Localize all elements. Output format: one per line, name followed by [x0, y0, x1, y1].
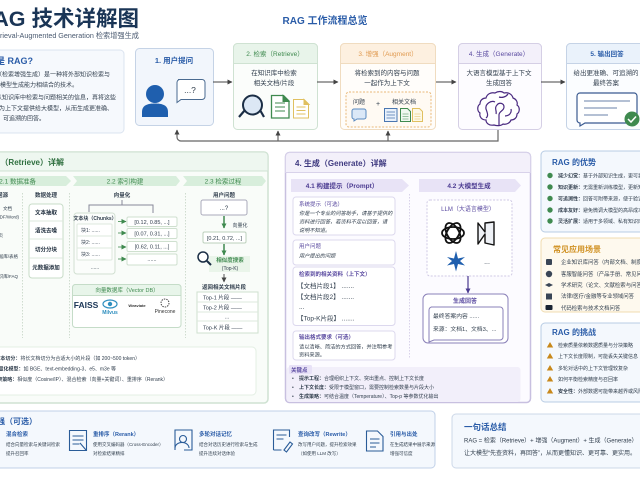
list: challenges: 如何平衡检索精度与召回率 — [558, 376, 618, 383]
box: system prompt: 资料进行回答，若资料不足以回答，请 — [299, 218, 388, 226]
callout: key points: 生成策略：可结合温度（Temperature）、Top-p 等参数优化输出 — [299, 393, 438, 400]
box: retrieved context: 【Top-K片段】 ....... — [297, 314, 355, 322]
item: query rewrite: 改写用户问题，提升检索效果 — [298, 441, 357, 448]
text block: retrieve description: 相关文档/片段 — [254, 78, 295, 87]
icon: Milvus: Milvus — [102, 310, 118, 316]
box: generated answer: 来源：文档1、文档3、... — [433, 325, 497, 333]
text block: retrieve description: 在知识库中检索 — [251, 68, 297, 77]
panel: step 4 generate: 4. 生成（Generate） — [469, 49, 529, 58]
panel: what is RAG — [0, 50, 124, 133]
panel: RAG advantages — [541, 151, 640, 232]
box: generated answer — [423, 294, 508, 343]
diagram: retrieval process: Top-2 片段 —— — [203, 304, 242, 312]
item: citations — [366, 430, 435, 457]
box: generated answer: 最终答案内容 ...... — [433, 312, 479, 320]
icon: knot logo — [442, 220, 464, 246]
icon: speech bubble: ...? — [184, 85, 196, 95]
arrow: step 1 to 2 — [213, 81, 232, 83]
column: data processing — [29, 191, 63, 278]
panel: step 1 user question — [136, 48, 214, 126]
icon: answer bubble with check — [577, 93, 640, 126]
diagram: retrieval process: Top-1 片段 —— — [203, 294, 242, 302]
icon: magnifier — [239, 96, 264, 117]
box: output format: 输出格式要求（可选） — [299, 333, 354, 341]
arrow: step 4 to 5 — [541, 81, 565, 83]
heading: workflow overview: RAG 工作流程总览 — [282, 14, 368, 27]
text block: output description — [574, 68, 639, 87]
heading: step 1: 1. 用户提问 — [155, 55, 193, 65]
panel: vector database: 向量数据库（Vector DB） — [95, 286, 159, 294]
callout: key points: • — [292, 385, 294, 391]
diagram: retrieval process: ...? — [220, 206, 229, 212]
box: user question — [293, 240, 395, 265]
item: hybrid search: 结合向量检索与关键词检索 — [6, 441, 60, 448]
item: conversation memory: 结合对话历史进行检索与生成 — [199, 441, 258, 448]
arrow: step 3 to 4 — [436, 81, 456, 83]
diagram: vectorization: [0.12, 0.85, ...] — [134, 220, 170, 226]
text block: augment description — [354, 68, 420, 87]
panel: challenges: RAG 的挑战 — [552, 327, 596, 337]
callout: key points: 提示工程：合理组织上下文、突出重点、控制上下文长度 — [299, 375, 424, 382]
diagram: retrieval process: 用户问题 — [213, 191, 235, 199]
panel: use cases — [541, 238, 640, 312]
panel: step 3 augment: 3. 增强（Augment） — [358, 49, 418, 58]
text block: definition — [0, 70, 116, 122]
diagram: vectorization: ...... — [91, 265, 99, 271]
item: hybrid search: 提升召回率 — [6, 450, 29, 457]
box: LLM models — [427, 200, 512, 276]
panel: one-sentence summary: 一句话总结 — [464, 422, 507, 432]
panel: one-sentence summary — [452, 414, 640, 468]
text block: output description: 最终答案 — [593, 78, 620, 87]
column: data processing: 切分分块 — [35, 246, 57, 254]
box: retrieved context: 【文档片段1】 ....... — [297, 281, 354, 290]
diagram: vectorization: 块2: ...... — [81, 239, 100, 246]
box: generated answer: 生成回答 — [453, 297, 477, 305]
icon: Pinecone: Pinecone — [155, 309, 176, 315]
box: LLM models: LLM（大语言模型） — [441, 205, 495, 213]
box: user question: 用户提出的问题 — [299, 252, 336, 260]
list: challenges: 上下文长度限制，可能丢失关键信息 — [558, 353, 638, 360]
chevrons: retrieve sections: 2.3 检索过程 — [205, 176, 242, 186]
icons: green checks — [547, 173, 553, 224]
diagram: vectorization: 块3: ...... — [81, 251, 100, 258]
callout: key points: 关键点 — [291, 366, 308, 374]
list: challenges: 检索质量依赖数据质量与分块策略 — [558, 342, 633, 349]
panel: vector database: FAISS — [74, 300, 99, 310]
item: rerank: 重排序（Rerank） — [93, 430, 139, 438]
chevrons: retrieve sections — [0, 176, 266, 186]
list: challenges — [558, 342, 640, 395]
text block: summary — [464, 436, 638, 457]
panel: step 2 retrieve: 2. 检索（Retrieve） — [246, 49, 304, 58]
diagram: retrieval process: Top-K 片段 —— — [203, 324, 243, 332]
diagram: retrieval process — [197, 191, 258, 333]
box: output format — [293, 331, 395, 360]
text block: generate description — [466, 68, 532, 87]
box: LLM models: ... — [484, 259, 490, 266]
icon: green document — [272, 96, 289, 118]
diagram: vectorization: 块1: ...... — [81, 227, 100, 234]
text block: retrieve description — [251, 68, 297, 87]
panel: vector database: Weaviate — [128, 303, 146, 308]
text block: augment description: 将检索到的内容与问题 — [354, 68, 420, 77]
diagram: retrieval process: 相似度搜索 — [216, 256, 244, 264]
icon: angular logo — [478, 222, 494, 245]
panel: step 4 generate — [458, 44, 542, 130]
callout: key points: • — [292, 376, 294, 382]
chevrons: retrieve sections: 2.1 数据准备 — [0, 176, 36, 186]
box: output format: 资料来源。 — [299, 350, 325, 358]
item: citations: 引用与出处 — [390, 430, 418, 438]
arrow: feedback loop — [177, 130, 498, 141]
item: conversation memory: 提升连续对话体验 — [199, 450, 235, 457]
diagram: retrieval process: [0.21, 0.72, ...] — [207, 236, 243, 242]
list: use cases: 法律/医疗/金融等专业领域问答 — [561, 292, 635, 300]
heading: generate detail: 4. 生成（Generate）详解 — [295, 158, 387, 168]
arrow: LLM to answer — [467, 276, 469, 293]
panel: retrieve detail — [0, 152, 268, 403]
item: query rewrite — [274, 430, 357, 457]
icon: search — [198, 252, 211, 265]
panel: generate detail — [286, 152, 530, 402]
box: system prompt — [293, 197, 395, 235]
text block: generate description: 生成回答 — [486, 78, 512, 87]
panel: challenges — [541, 323, 640, 402]
diagram: question plus documents: + — [376, 101, 380, 108]
diagram: question plus documents — [346, 92, 431, 127]
item: rerank — [70, 430, 164, 457]
box: retrieved context — [293, 267, 395, 326]
item: citations: 增强可信度 — [390, 450, 413, 457]
callout: retrieve key points — [0, 347, 256, 395]
item: hybrid search: 混合检索 — [6, 430, 29, 438]
text block: generate description: 大语言模型基于上下文 — [466, 68, 532, 77]
item: rerank: 使用交叉编码器（Cross-Encoder） — [93, 441, 164, 448]
panel: RAG advantages: RAG 的优势 — [552, 157, 596, 167]
callout: key points: 上下文长度：受限于模型窗口，需要控制检索数量与片段大小 — [299, 384, 434, 391]
icon: blue star — [447, 251, 465, 272]
diagram: vectorization: [0.62, 0.11, ...] — [135, 244, 170, 250]
chevrons: generate sections — [291, 179, 521, 192]
column: data sources — [0, 191, 19, 280]
box: retrieved context: 【文档片段2】 ....... — [297, 292, 354, 301]
list: use cases: 代码检索与技术文档问答 — [561, 304, 621, 312]
box: system prompt: 说明不知道。 — [299, 227, 330, 234]
panel: vector database — [72, 284, 181, 328]
diagram: retrieval process: 返回相关文档片段 — [202, 283, 246, 291]
icon: brain — [478, 92, 519, 126]
box: output format: 请以清晰、简洁的方式回答，并注明参考 — [299, 342, 392, 350]
panel: step 5 output — [566, 44, 640, 130]
diagram: question plus documents: 问题 — [353, 98, 365, 106]
item: conversation memory — [175, 430, 258, 457]
callout: key points — [286, 365, 520, 402]
icons: warnings — [547, 342, 553, 394]
column: data sources: 文档 — [3, 205, 12, 212]
icon: user — [142, 85, 168, 117]
diagram: vectorization — [73, 191, 177, 274]
box: retrieved context: 检索到的相关资料（上下文） — [299, 270, 371, 278]
item: citations: 在生成结果中展示来源 — [390, 441, 435, 448]
callout: key points: • — [292, 394, 294, 400]
column: data processing: 数据处理 — [35, 191, 57, 199]
panel: step 5 output: 5. 输出回答 — [590, 49, 624, 58]
item: hybrid search — [6, 430, 60, 457]
text block: output description: 给出更准确、可追溯的 — [574, 68, 639, 77]
diagram: vectorization: 向量化 — [114, 191, 131, 199]
panel: enhancements — [0, 411, 435, 468]
chevrons: generate sections: 4.2 大模型生成 — [447, 181, 491, 190]
arrow: step 2 to 3 — [317, 81, 338, 83]
column: data processing: 清洗去噪 — [35, 226, 57, 234]
text block: summary: RAG = 检索（Retrieve）+ 增强（Augment）+ 生成（Generate） — [464, 436, 638, 444]
column: data processing: 文本抽取 — [35, 208, 57, 216]
list: challenges: 多轮对话中的上下文管理较复杂 — [558, 365, 628, 372]
chevrons: generate sections: 4.1 构建提示（Prompt） — [306, 181, 378, 190]
icons: use cases — [545, 259, 553, 310]
panel: use cases: 常见应用场景 — [553, 244, 601, 254]
diagram: question plus documents: 相关文档 — [392, 98, 416, 106]
text block: summary: 让大模型“先查资料，再回答”，从而更懂知识、更可靠、更实用。 — [464, 449, 636, 457]
diagram: vectorization: ...... — [147, 257, 157, 263]
panel: step 2 retrieve — [234, 44, 318, 130]
box: system prompt: 系统提示（可选） — [299, 200, 343, 208]
diagram: vectorization: [0.07, 0.31, ...] — [134, 232, 170, 238]
list: use cases — [561, 258, 640, 312]
item: conversation memory: 多轮对话记忆 — [199, 430, 233, 438]
diagram: vectorization: 文本块（Chunks） — [73, 215, 117, 222]
text block: augment description: 一起作为上下文 — [364, 78, 410, 87]
diagram: retrieval process: ... — [225, 314, 230, 320]
diagram: retrieval process: 向量化 — [232, 222, 248, 229]
box: retrieved context: ... — [299, 304, 305, 311]
diagram: retrieval process: (Top-K) — [222, 266, 239, 272]
item: query rewrite: 查询改写（Rewrite） — [298, 430, 351, 438]
item: query rewrite: （如使用 LLM 改写） — [298, 450, 341, 457]
chevrons: retrieve sections: 2.2 索引构建 — [107, 176, 144, 186]
icon: yellow document — [294, 100, 309, 118]
panel: step 3 augment — [340, 44, 436, 130]
box: user question: 用户问题 — [299, 242, 322, 250]
column: data processing: 元数据添加 — [32, 264, 60, 272]
box: system prompt: 你是一个专业的问答助手，请基于提供的 — [299, 210, 393, 217]
list: advantages — [558, 172, 640, 225]
item: rerank: 对检索结果精排 — [93, 450, 125, 457]
